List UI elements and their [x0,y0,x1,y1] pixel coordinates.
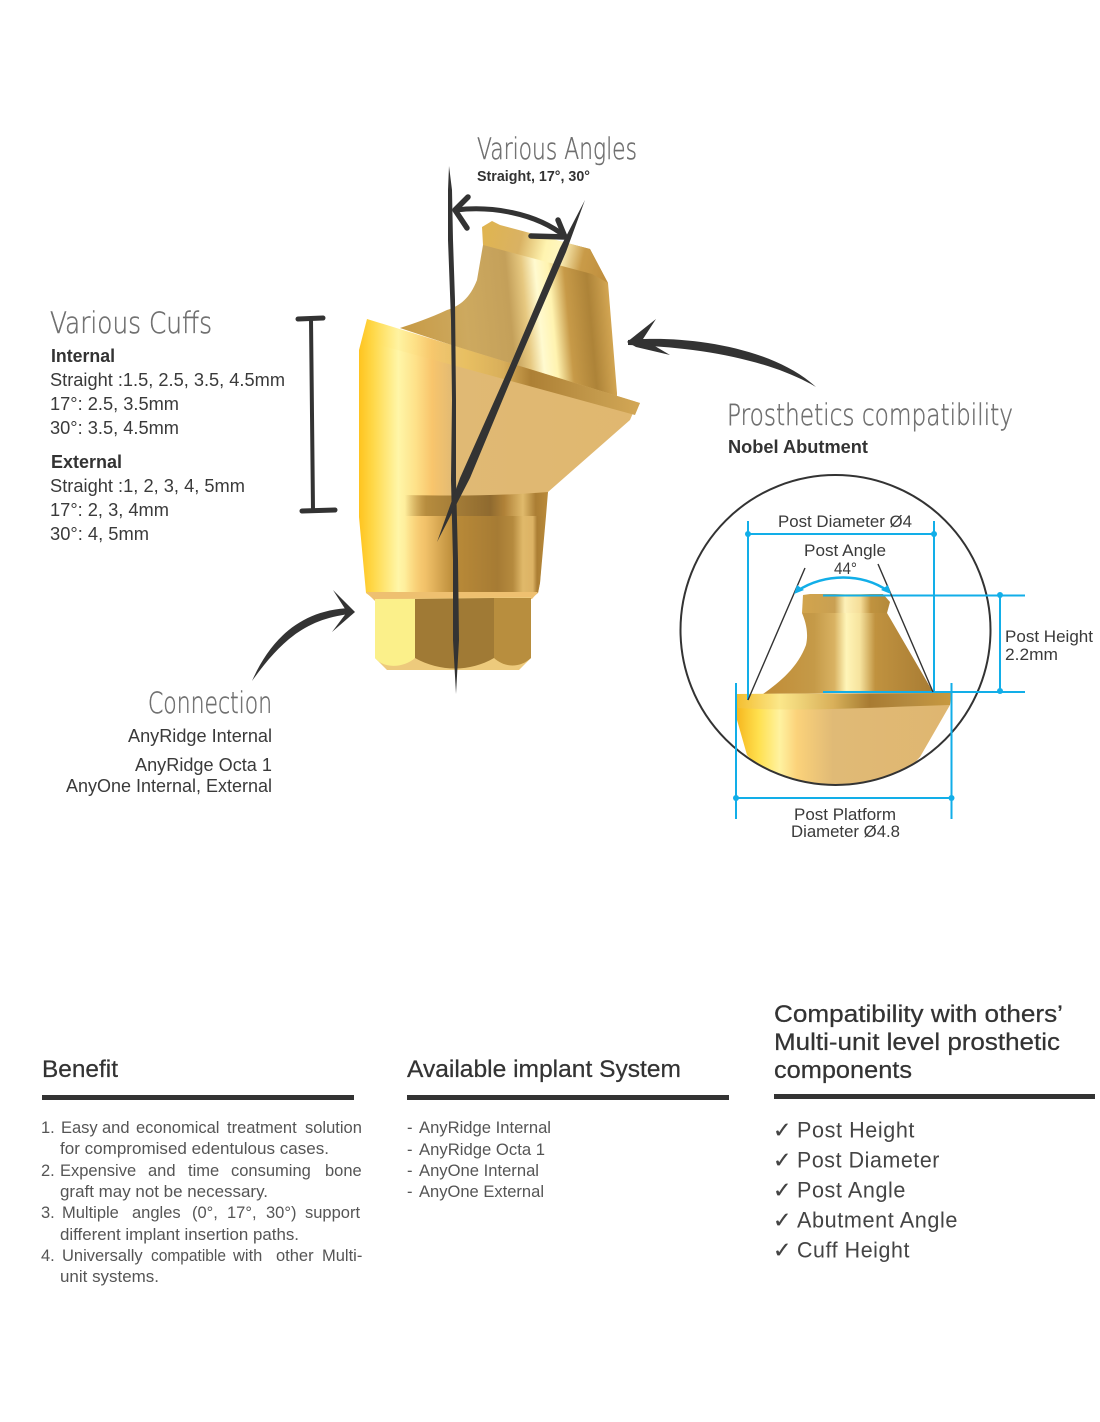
measurement labels: 2.2mm [1005,646,1058,664]
lower cylinder [405,516,546,593]
prosthetics compatibility label: Nobel Abutment [728,437,868,457]
system list [407,1119,551,1201]
benefit list [41,1119,362,1286]
measurement labels: Post Height [1005,628,1093,646]
various cuffs label: 30°: 3.5, 4.5mm [50,418,179,438]
benefit list: Multiple [62,1204,119,1222]
benefit list: bone [325,1162,362,1180]
checklist: Abutment Angle [797,1207,958,1232]
measurement labels [778,513,1093,841]
various cuffs label: Various Cuffs [50,306,212,340]
angle arrow [455,197,566,237]
benefit list: 17°, [227,1204,257,1222]
checklist: Post Height [797,1118,915,1142]
benefit list: other [276,1247,314,1265]
connection label: Connection [148,686,272,720]
compatibility column [773,1001,1095,1262]
benefit list: treatment [227,1119,297,1137]
benefit list: with [232,1247,262,1265]
benefit list: Easy [61,1119,98,1137]
various angles label: Various Angles [477,132,637,166]
checklist: ✓ [773,1147,792,1172]
checklist: ✓ [773,1177,792,1202]
benefit list: economical [136,1119,219,1137]
benefit list: 30°) [266,1204,296,1222]
prosthetics arrow [627,319,816,387]
various cuffs label [50,306,285,544]
connection label: AnyOne Internal, External [66,776,272,796]
benefit list: 1. [41,1119,55,1137]
benefit list: and [148,1162,176,1180]
measurement labels: Diameter Ø4.8 [791,823,900,841]
system list: - [407,1183,412,1201]
benefit column: Benefit [42,1056,118,1083]
measurement labels: Post Platform [794,806,896,824]
main abutment illustration [359,221,640,670]
benefit list: (0°, [192,1204,218,1222]
checklist: ✓ [773,1118,792,1142]
lower cylinder shadow band [405,492,548,516]
measurement labels: 44° [834,560,857,578]
benefit list: support [305,1204,360,1222]
benefit list: Expensive [60,1162,136,1180]
abutment body [359,319,640,600]
checklist: ✓ [773,1237,792,1262]
detail base [737,693,950,784]
system list: AnyRidge Internal [419,1119,551,1137]
system list: AnyOne Internal [419,1162,539,1180]
connection label: AnyRidge Octa 1 [135,755,272,775]
cuff height bracket [298,318,335,511]
benefit list: 4. [41,1247,55,1265]
compatibility column: components [774,1057,912,1084]
system list: AnyOne External [419,1183,544,1201]
abutment post [400,226,617,400]
compatibility column: Multi-unit level prosthetic [774,1029,1060,1056]
checklist: ✓ [773,1207,792,1232]
benefit list: time [188,1162,219,1180]
system list: - [407,1119,412,1137]
checklist: Post Angle [797,1177,906,1202]
available implant system column: Available implant System [407,1056,681,1083]
benefit list: solution [305,1119,362,1137]
abutment post cap [482,221,608,283]
checklist: Post Diameter [797,1147,940,1172]
benefit column [41,1056,362,1286]
system list: - [407,1162,412,1180]
detail post [763,613,933,694]
various cuffs label: Straight :1, 2, 3, 4, 5mm [50,476,245,496]
benefit list: compatible [151,1247,226,1265]
checklist [773,1118,958,1262]
various angles label: Straight, 17°, 30° [477,169,590,185]
post angle lines [748,564,933,700]
benefit list: graft may not be necessary. [60,1183,268,1201]
hex connection [375,597,531,670]
various cuffs label: Internal [51,346,115,366]
prosthetics compatibility label [727,398,1013,457]
measurement lines [733,521,1025,819]
connection label: AnyRidge Internal [128,726,272,746]
benefit list: consuming [231,1162,311,1180]
compatibility column: Compatibility with others’ [774,1001,1063,1028]
benefit list: Multi- [322,1247,362,1265]
collar rim [361,319,640,415]
system list: - [407,1141,412,1159]
benefit list: Universally [62,1247,143,1265]
connection arrow [252,590,355,681]
detail post cap [802,594,890,613]
benefit list: different implant insertion paths. [60,1226,299,1244]
sketched vertical axis line [448,166,459,694]
measurement labels: Post Angle [804,542,886,560]
benefit list: unit systems. [60,1268,159,1286]
various angles label [477,132,637,185]
bottom ring [366,592,538,601]
benefit list: and [102,1119,130,1137]
detail circle outline [680,475,990,785]
available implant system column [407,1056,729,1201]
various cuffs label: External [51,452,122,472]
measurement labels: Post Diameter Ø4 [778,513,912,531]
benefit list: 2. [41,1162,55,1180]
various cuffs label: Straight :1.5, 2.5, 3.5, 4.5mm [50,370,285,390]
various cuffs label: 17°: 2.5, 3.5mm [50,394,179,414]
various cuffs label: 17°: 2, 3, 4mm [50,500,169,520]
benefit list: angles [132,1204,181,1222]
benefit list: 3. [41,1204,55,1222]
detail circle [680,475,990,800]
various cuffs label: 30°: 4, 5mm [50,524,149,544]
connection label [66,686,272,796]
prosthetics compatibility label: Prosthetics compatibility [727,398,1013,432]
system list: AnyRidge Octa 1 [419,1141,545,1159]
sketched angled axis line [437,200,585,542]
checklist: Cuff Height [797,1237,910,1262]
benefit list: for compromised edentulous cases. [60,1140,329,1158]
